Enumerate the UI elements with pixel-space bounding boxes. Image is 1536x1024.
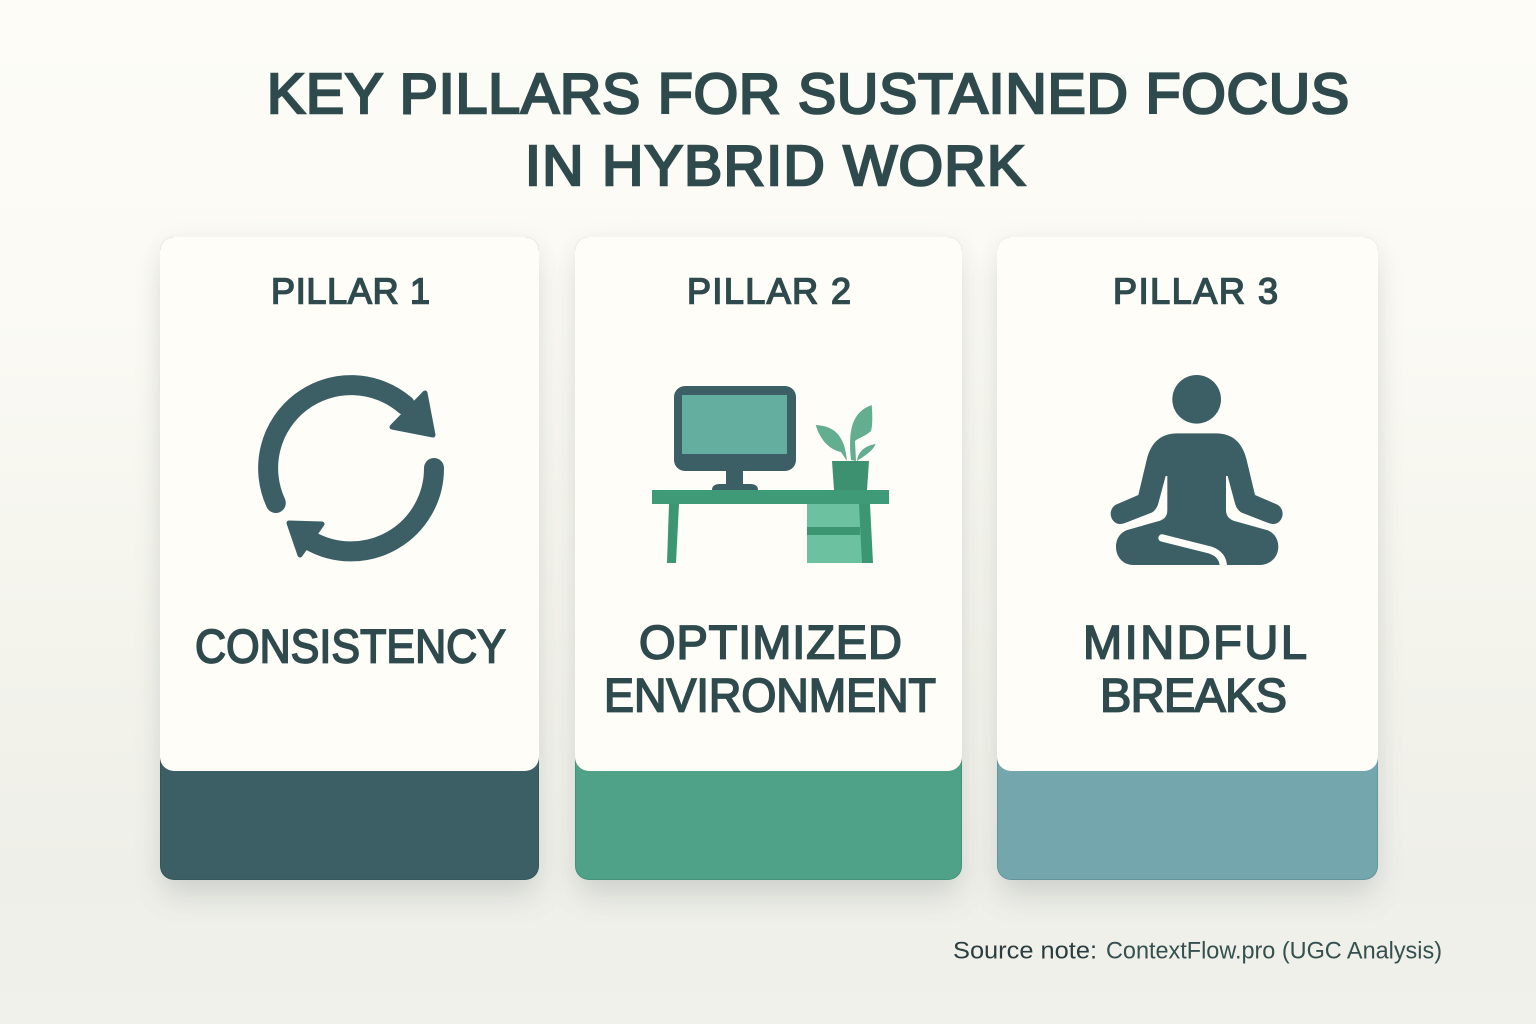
pillar 1 white area	[160, 237, 539, 771]
icon: desk with monitor and plant	[652, 386, 889, 563]
panel: pillar 1 card	[160, 237, 539, 880]
label: optimized environment	[604, 615, 936, 722]
panel: pillar 3 card	[997, 237, 1378, 880]
label: mindful breaks: BREAKS	[1100, 668, 1287, 722]
icon: meditating person	[1111, 375, 1283, 568]
label: consistency: CONSISTENCY	[195, 620, 506, 672]
source note: ContextFlow.pro (UGC Analysis)	[1106, 938, 1442, 965]
title: IN HYBRID WORK	[525, 134, 1025, 198]
pillar 2 white area	[575, 237, 962, 771]
pillar 3 white area	[997, 237, 1378, 771]
title	[267, 62, 1349, 198]
icon: circular arrows	[268, 385, 434, 555]
heading: pillar 2: PILLAR 2	[687, 270, 851, 311]
source note: Source note:	[953, 938, 1097, 965]
panel: pillar 2 card	[575, 237, 962, 880]
title: KEY PILLARS FOR SUSTAINED FOCUS	[267, 62, 1349, 126]
label: optimized environment: ENVIRONMENT	[604, 668, 936, 722]
label: mindful breaks: MINDFUL	[1083, 615, 1307, 668]
label: mindful breaks	[1083, 615, 1307, 722]
label: optimized environment: OPTIMIZED	[639, 615, 902, 668]
heading: pillar 3: PILLAR 3	[1113, 270, 1278, 311]
heading: pillar 1: PILLAR 1	[271, 270, 430, 311]
source note	[953, 938, 1442, 965]
